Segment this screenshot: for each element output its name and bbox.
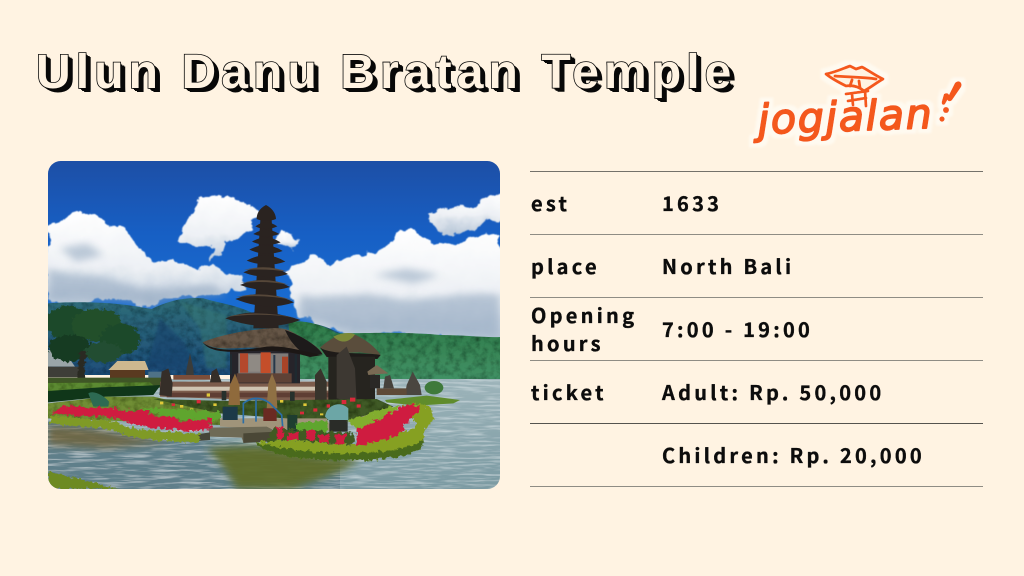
row: place value: North Bali	[662, 251, 794, 280]
stone steps	[197, 427, 277, 443]
row: ticket label: ticket	[531, 377, 607, 406]
right hedge	[255, 403, 433, 460]
photo: Ulun Danu Bratan temple on the lake	[48, 161, 500, 489]
clouds	[48, 192, 507, 342]
main thatched roof	[203, 328, 323, 357]
cloud shadow	[48, 243, 500, 338]
row: children ticket price: Children: Rp. 20,000	[662, 440, 925, 469]
mountain right ridge	[288, 321, 500, 382]
meru tower tiers	[225, 205, 301, 328]
foreground water with reflections	[48, 422, 360, 489]
row: est value: 1633	[662, 188, 722, 217]
meru roof highlights	[226, 267, 300, 319]
icon: lips roof	[826, 66, 883, 106]
foreground bank	[48, 472, 122, 489]
title: Ulun Danu Bratan Temple	[36, 46, 736, 99]
side shrine	[320, 333, 460, 406]
temple base wall	[159, 354, 328, 400]
right red flowers	[356, 405, 421, 446]
row: adult ticket price: Adult: Rp. 50,000	[662, 377, 884, 406]
lake water	[48, 379, 500, 489]
row: opening hours label	[531, 300, 637, 357]
logo wordmark: jogjalan	[752, 90, 933, 144]
tree	[46, 307, 140, 380]
left hedge with lawn	[49, 408, 220, 442]
left red flowers	[52, 405, 212, 431]
left lawn and hedge	[48, 378, 220, 425]
pagoda hall	[230, 350, 300, 383]
logo: jogjalan	[750, 61, 965, 147]
logo artwork	[752, 66, 962, 144]
table: temple facts	[530, 171, 983, 487]
mountains	[48, 298, 340, 375]
row: est label: est	[531, 188, 570, 217]
row: opening hours value: 7:00 - 19:00	[662, 314, 813, 343]
row: place label: place	[531, 251, 600, 280]
icon: exclamation marks	[939, 81, 962, 122]
row: opening hours label: hours	[531, 328, 604, 357]
statues and gate	[222, 373, 348, 432]
sky	[48, 161, 500, 341]
central garden	[153, 393, 393, 432]
small red flowers	[277, 428, 346, 444]
left pavilions	[48, 350, 168, 379]
row: opening hours label: Opening	[531, 300, 637, 329]
